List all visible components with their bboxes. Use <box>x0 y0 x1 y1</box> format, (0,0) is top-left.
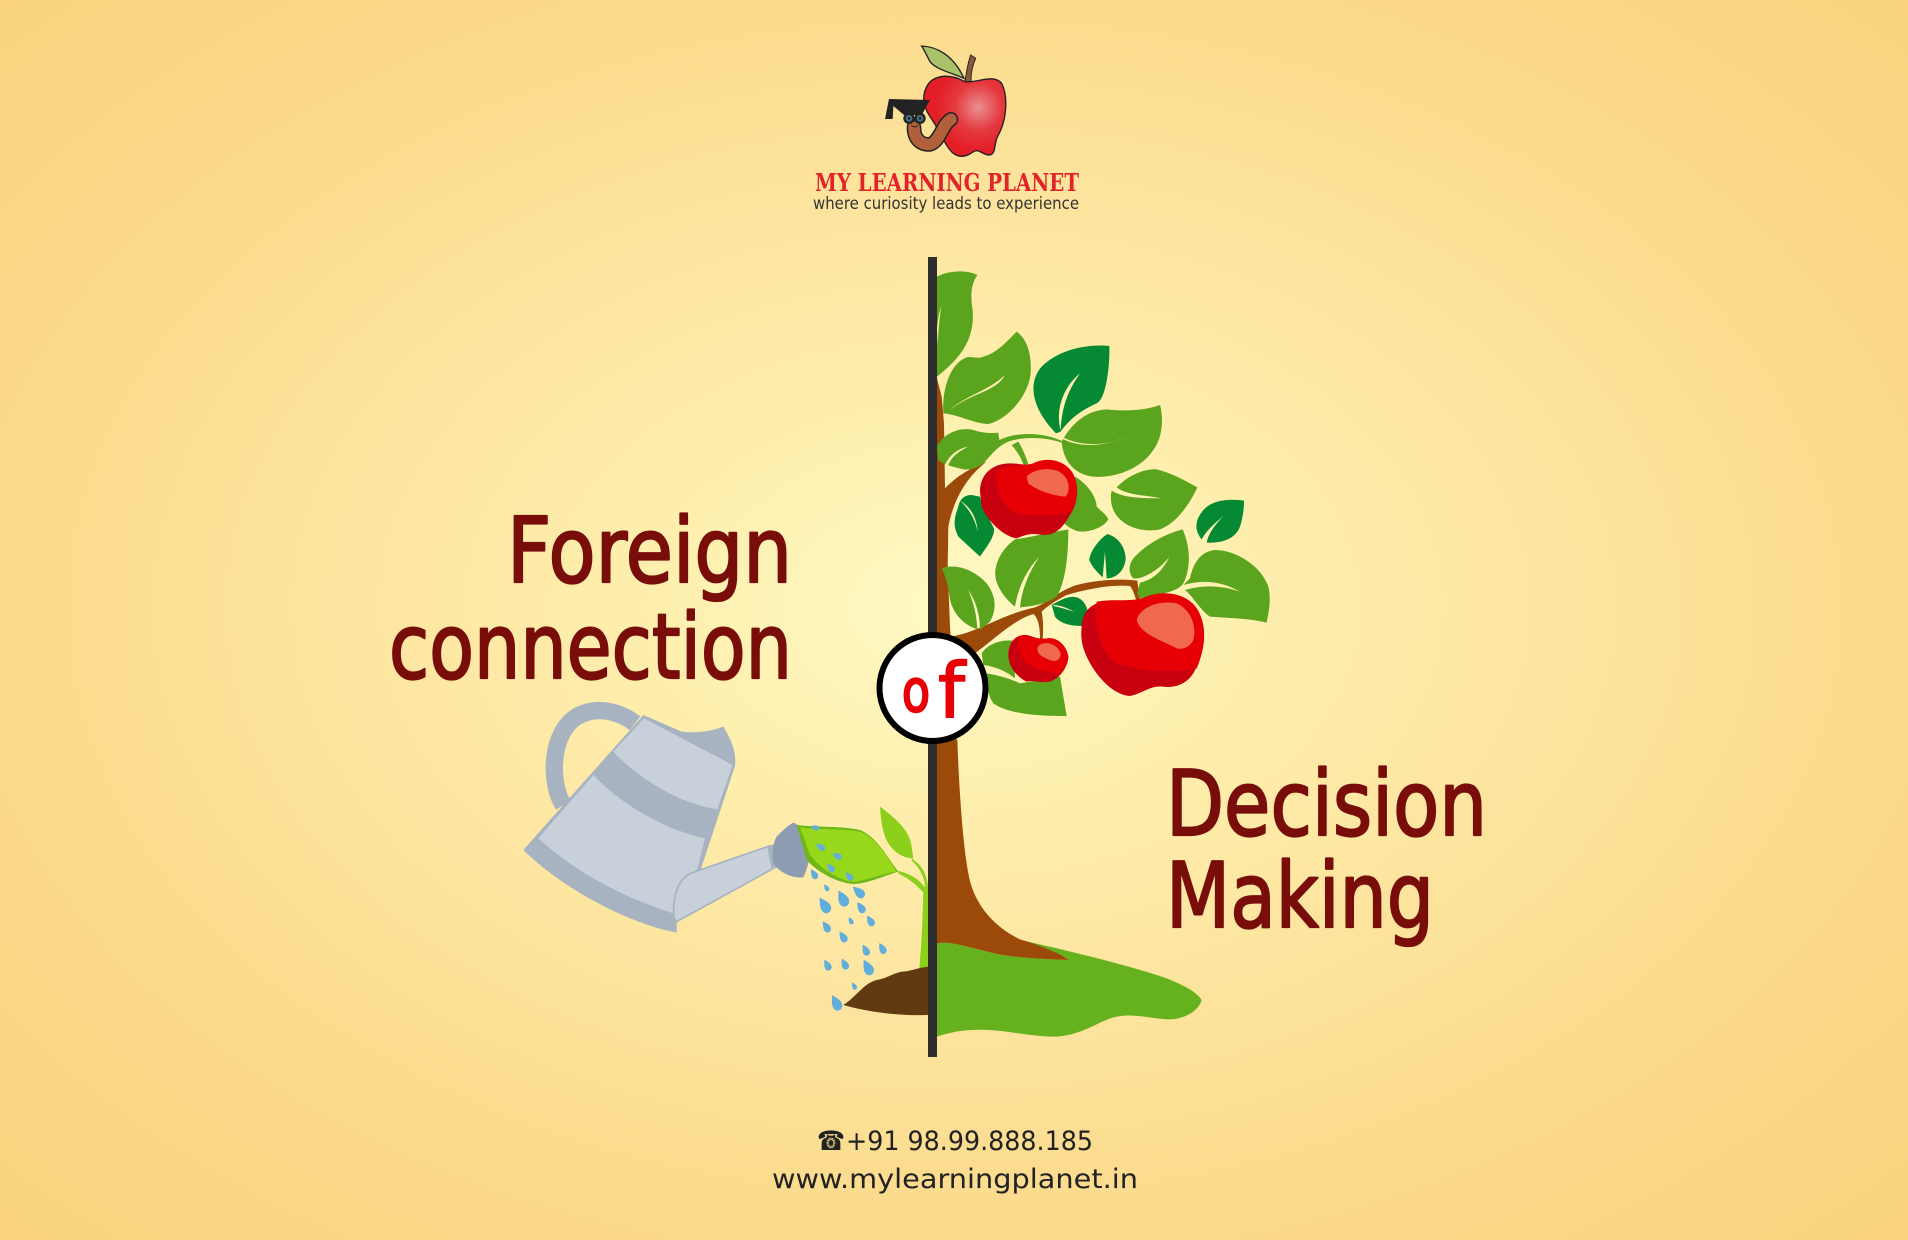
tree with leaves and apples <box>937 271 1270 750</box>
contact: website: www.mylearningplanet.in <box>772 1164 1138 1195</box>
dark leaves <box>955 346 1244 626</box>
badge: of: o <box>902 657 930 725</box>
heading: Decision Making: Making <box>1166 844 1434 949</box>
apple: upper <box>980 460 1077 538</box>
sapling with soil <box>797 807 928 1015</box>
ground <box>937 940 1202 1037</box>
trunk and branches <box>937 378 1141 750</box>
badge: of: f <box>938 646 967 735</box>
apple: large <box>1081 593 1204 696</box>
contact: phone: +91 98.99.888.185 <box>846 1126 1093 1157</box>
tree trunk root <box>937 740 1069 960</box>
contact: phone: ☎ <box>817 1126 845 1157</box>
icon: watering can <box>523 711 810 933</box>
heading: Decision Making: Decision <box>1166 752 1487 857</box>
leaf veins <box>937 305 1127 678</box>
logo tagline: where curiosity leads to experience <box>813 194 1079 214</box>
logo name: MY LEARNING PLANET <box>815 168 1079 197</box>
heading: Decision Making <box>1166 752 1487 949</box>
apple: small <box>1008 635 1068 682</box>
water drops <box>809 823 888 1012</box>
green leaves <box>937 271 1270 716</box>
logo <box>813 46 1079 214</box>
badge: of <box>880 635 986 741</box>
heading: Foreign connection <box>389 499 792 700</box>
heading: Foreign connection: connection <box>389 595 792 700</box>
center pole <box>928 257 937 1057</box>
logo icon: apple with worm <box>885 46 1006 156</box>
heading: Foreign connection: Foreign <box>507 499 792 604</box>
